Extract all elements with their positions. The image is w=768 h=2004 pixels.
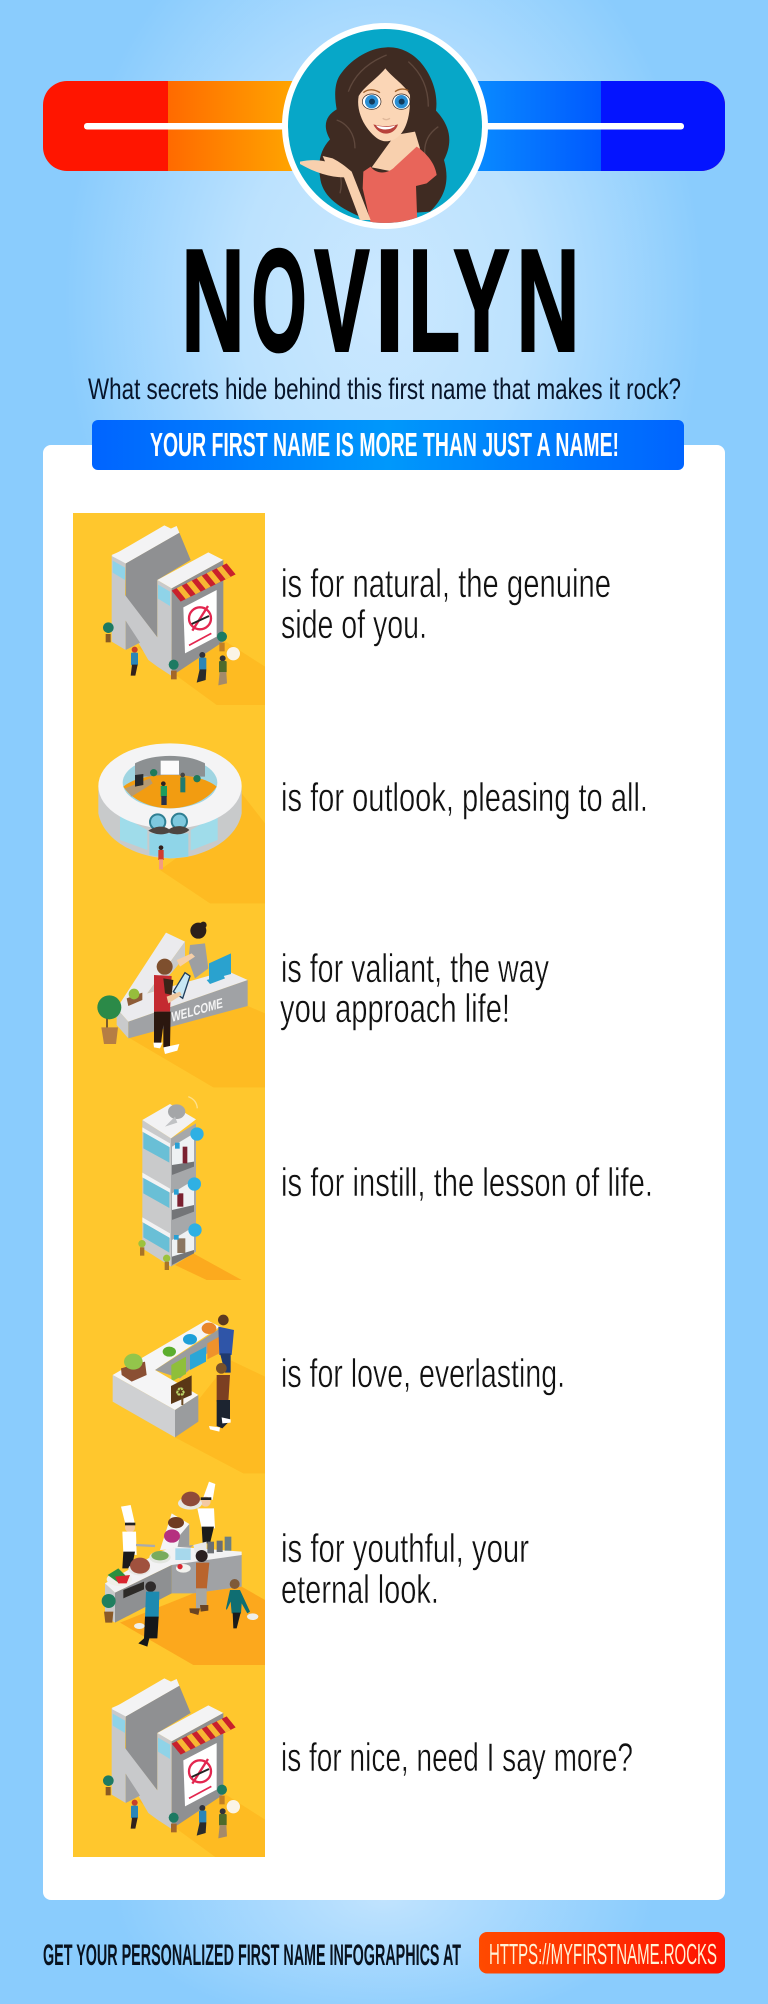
text: V is for valiant: you approach life! [280, 987, 510, 1031]
title: N [182, 220, 244, 382]
icon: N building repeated [103, 1678, 265, 1858]
title: N [517, 220, 579, 382]
icon: welcome desk [97, 922, 265, 1087]
mouth [373, 124, 398, 134]
hair [319, 47, 449, 217]
text: N is for natural [281, 562, 611, 647]
text: V is for valiant [280, 947, 549, 1031]
icon: ring building with glasses [98, 743, 265, 903]
icon: office tower [138, 1097, 242, 1280]
arm and hand [300, 156, 371, 220]
title: Y [454, 220, 510, 382]
hair highlights [330, 55, 438, 193]
panel: yellow illustration strip [73, 513, 265, 1858]
text: N is for natural: is for natural, the genuine [281, 562, 611, 606]
title: I [375, 220, 404, 382]
panel: content card [43, 445, 725, 1900]
text: Y is for youthful: eternal look. [281, 1568, 439, 1612]
text: V is for valiant: is for valiant, the way [281, 947, 549, 991]
title: L [408, 220, 460, 382]
eyes [362, 94, 381, 109]
header ribbon [43, 81, 725, 171]
title: V [314, 220, 369, 382]
shirt [363, 147, 437, 223]
avatar portrait [282, 23, 488, 229]
face [358, 68, 410, 141]
title: O [252, 220, 306, 382]
icon: recycling counter: ♻ [175, 1385, 186, 1399]
text: N is for natural: side of you. [281, 603, 427, 647]
footer url button [479, 1932, 725, 1974]
icon: recycling counter [113, 1315, 265, 1473]
icon: N building [103, 525, 265, 705]
icon: welcome desk: WELCOME [171, 995, 223, 1025]
text: L is for love: is for love, everlasting. [281, 1352, 565, 1396]
icon: buffet counter [102, 1482, 265, 1665]
text: Y is for youthful [281, 1527, 529, 1612]
banner [92, 420, 684, 470]
neck [372, 132, 420, 172]
text: Y is for youthful: is for youthful, your [281, 1527, 529, 1571]
brows [363, 89, 408, 93]
